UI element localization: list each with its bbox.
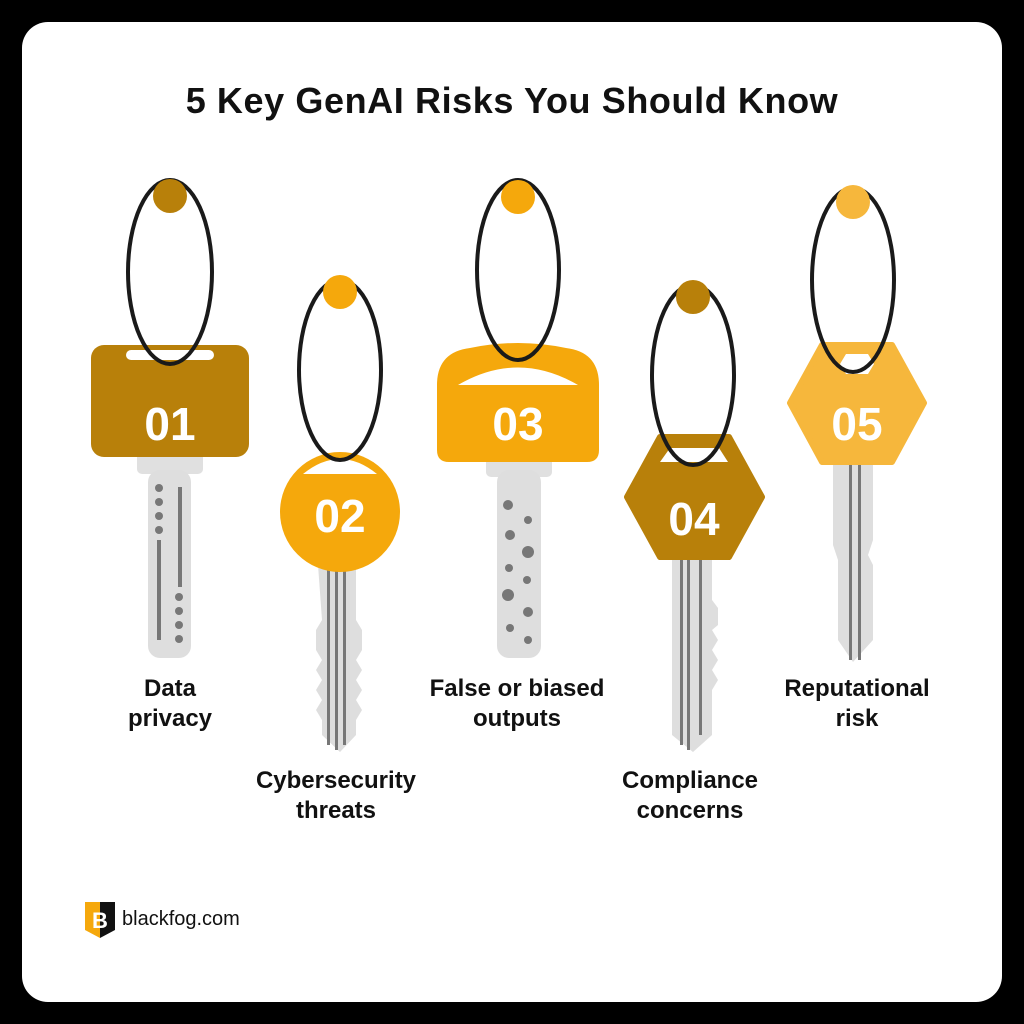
label 02: threats [296, 797, 376, 824]
head 01 [91, 345, 249, 457]
label 02: Cybersecurity [256, 767, 417, 794]
key 03: false outputs: 03 [492, 398, 544, 450]
blade 03 [486, 455, 552, 658]
key 04: compliance [627, 280, 762, 752]
title: 5 Key GenAI Risks You Should Know [186, 80, 839, 121]
label 05: Reputational [784, 675, 930, 702]
blade 05 [833, 458, 873, 662]
key 01: data privacy [91, 179, 249, 658]
icon: shield [85, 902, 115, 938]
label 04: concerns [637, 797, 743, 824]
ring 03 [477, 180, 559, 360]
key 05: reputational: 05 [831, 398, 883, 450]
key 04: compliance: 04 [668, 493, 720, 545]
blade 01 [137, 450, 203, 658]
icon: shield: B [92, 908, 108, 933]
label 04: Compliance [622, 767, 758, 794]
key 02: cybersecurity: 02 [314, 490, 366, 542]
head 04 [627, 437, 762, 557]
key 05: reputational [790, 185, 924, 662]
key 01: data privacy: 01 [144, 398, 196, 450]
logo: blackfog.com [122, 908, 240, 930]
ring 01 [128, 180, 212, 364]
ring 04 [652, 285, 734, 465]
blade 04 [672, 552, 718, 752]
ring 02 [299, 280, 381, 460]
key 03: false outputs [437, 180, 599, 658]
label 01: Data [144, 675, 197, 702]
head 02 [280, 452, 400, 572]
label 03: outputs [473, 705, 561, 732]
key 02: cybersecurity [280, 275, 400, 752]
ring 05 [812, 188, 894, 372]
logo [85, 902, 240, 938]
blade 02 [316, 565, 362, 752]
label 03: False or biased [430, 675, 604, 702]
head 03 [437, 343, 599, 462]
head 05 [790, 345, 924, 462]
label 01: privacy [128, 705, 213, 732]
label 05: risk [836, 705, 879, 732]
